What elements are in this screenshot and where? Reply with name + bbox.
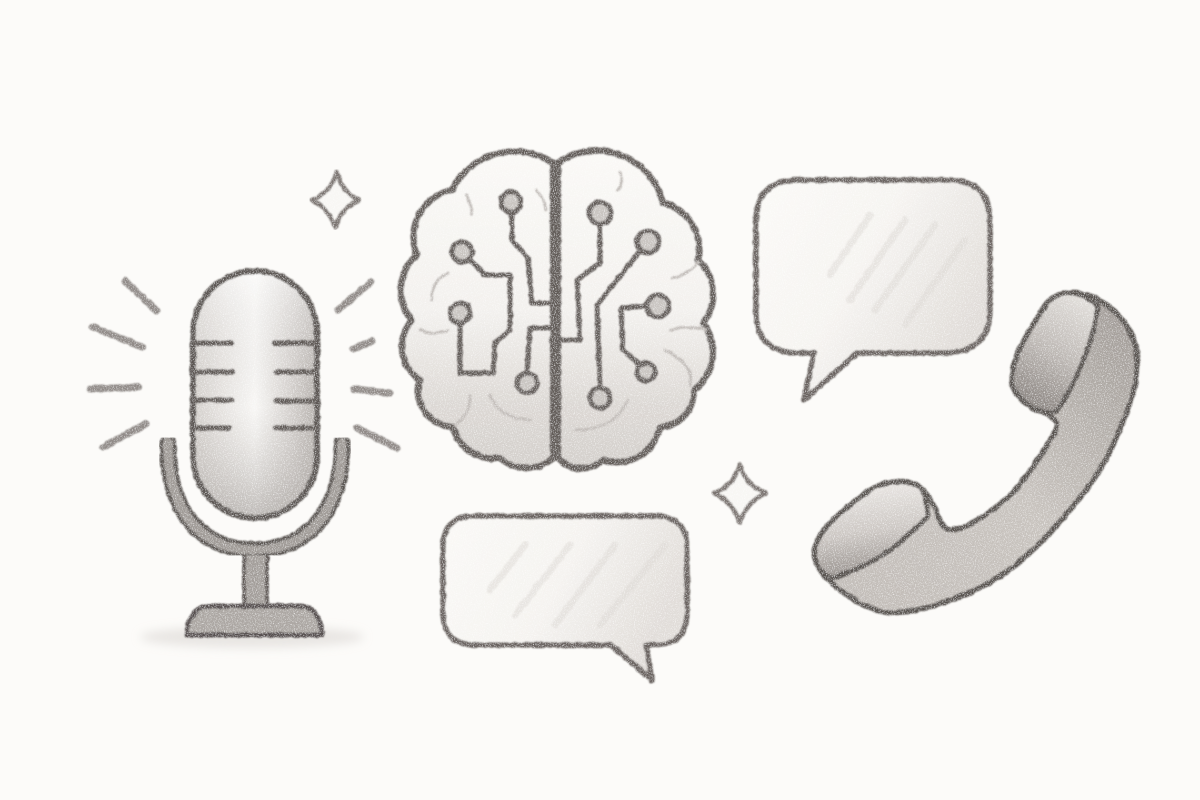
brain outline left hemisphere (401, 151, 713, 468)
mouthpiece (814, 482, 928, 578)
mic cradle (168, 443, 342, 550)
icon: telephone handset (814, 293, 1137, 613)
hatching (830, 215, 965, 325)
icon: brain with circuit traces (401, 151, 713, 468)
mic sound rays (90, 281, 397, 448)
sparkle: lower centre (714, 464, 766, 523)
brain outline right hemisphere (558, 151, 713, 468)
earpiece (1012, 293, 1098, 413)
mic capsule (193, 271, 317, 518)
brain folds (420, 172, 705, 430)
speech bubble: upper right (756, 180, 990, 400)
mic grille slats (195, 343, 315, 428)
mic ground shadow (140, 626, 364, 648)
icon: microphone (90, 271, 397, 648)
speech bubble: lower centre (443, 516, 687, 680)
sparkle: upper left (312, 172, 359, 227)
brain circuit nodes (450, 192, 669, 408)
handset body (814, 293, 1137, 613)
mic stem and base (187, 552, 322, 635)
brain centre fissure (552, 162, 558, 460)
hatching (490, 545, 665, 625)
brain circuit traces (460, 212, 648, 388)
